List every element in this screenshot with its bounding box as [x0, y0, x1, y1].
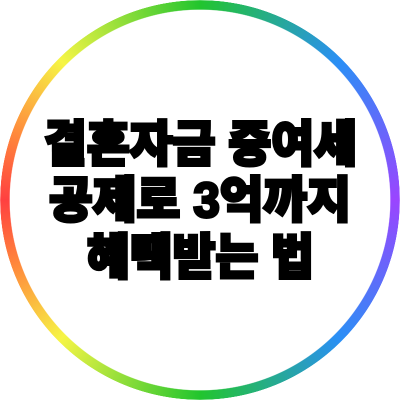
title line 1: 결혼자금 증여세	[44, 118, 357, 172]
title line 3: 혜택받는 법	[87, 231, 314, 285]
title line 2: 공제로 3억까지	[49, 174, 351, 228]
